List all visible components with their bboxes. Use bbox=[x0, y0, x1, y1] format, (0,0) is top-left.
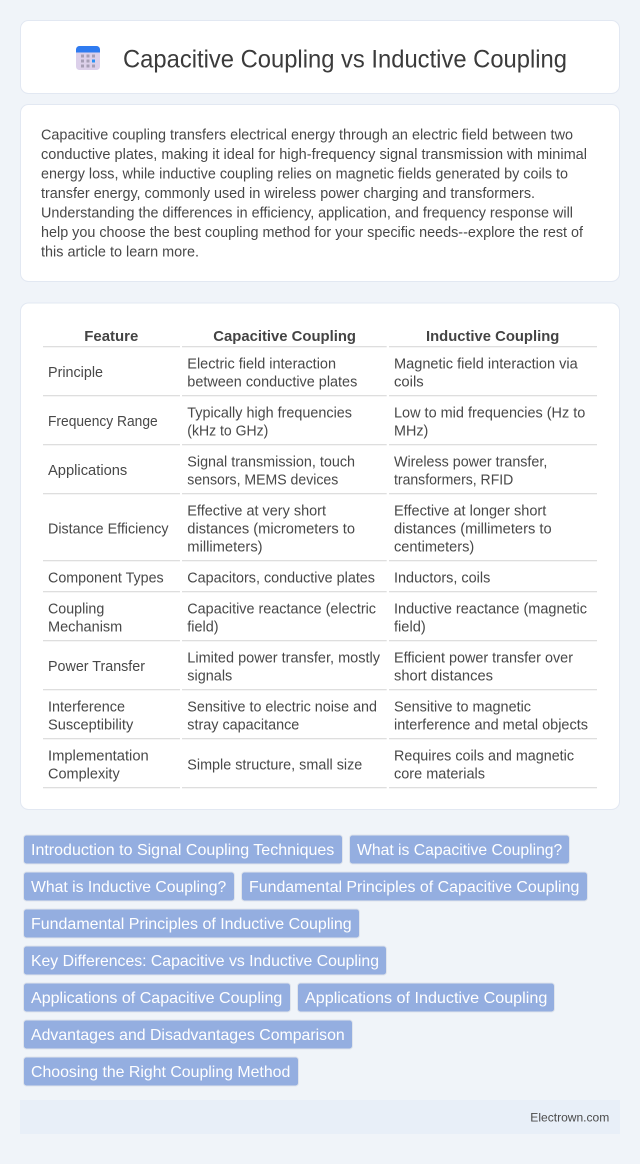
row: interference susceptibility: interference and metal objects bbox=[394, 717, 588, 733]
intro paragraph: Understanding the differences in efficiency, application, and frequency response will bbox=[41, 204, 573, 221]
row: frequency range: Typically high frequencies bbox=[187, 405, 352, 421]
panel: comparison table bbox=[20, 303, 620, 810]
intro paragraph: Capacitive coupling transfers electrical energy through an electric field between two bbox=[41, 126, 573, 143]
tag: introduction: Introduction to Signal Coupling Techniques bbox=[31, 842, 334, 859]
intro paragraph: transfer energy, commonly used in wireless power charging and transformers. bbox=[41, 185, 535, 202]
tag: applications of inductive coupling: Applications of Inductive Coupling bbox=[305, 990, 547, 1007]
row: distance efficiency: centimeters) bbox=[394, 539, 474, 555]
tag: key differences: Key Differences: Capacitive vs Inductive Coupling bbox=[31, 953, 379, 970]
intro paragraph: conductive plates, making it ideal for high-frequency signal transmission with minimal bbox=[41, 146, 587, 163]
footer bbox=[20, 1100, 620, 1134]
row: frequency range bbox=[43, 405, 597, 445]
tag: what is capacitive coupling: What is Capacitive Coupling? bbox=[357, 842, 562, 859]
row: distance efficiency bbox=[43, 503, 597, 561]
panel: topic tags bbox=[24, 835, 588, 1086]
row: applications: Wireless power transfer, bbox=[394, 454, 547, 470]
row: power transfer: short distances bbox=[394, 668, 493, 684]
row: distance efficiency: Distance Efficiency bbox=[48, 521, 169, 537]
title: Capacitive Coupling vs Inductive Coupling bbox=[123, 46, 567, 74]
tag: advantages and disadvantages bbox=[24, 1020, 352, 1049]
panel: header bbox=[20, 20, 620, 94]
row: coupling mechanism: Inductive reactance (magnetic bbox=[394, 601, 587, 617]
row: implementation complexity bbox=[43, 748, 597, 788]
intro paragraph bbox=[41, 126, 587, 260]
row: principle: Magnetic field interaction via bbox=[394, 356, 579, 372]
row: frequency range: (kHz to GHz) bbox=[187, 423, 268, 439]
tag: choosing the right method bbox=[24, 1057, 298, 1086]
row: frequency range: MHz) bbox=[394, 423, 428, 439]
row: coupling mechanism: Mechanism bbox=[48, 619, 122, 635]
row: component types: Component Types bbox=[48, 570, 164, 586]
row: interference susceptibility bbox=[43, 699, 597, 739]
row: distance efficiency: Effective at very short bbox=[187, 503, 326, 519]
table header row: Capacitive Coupling bbox=[213, 328, 356, 345]
row: implementation complexity: Simple structure, small size bbox=[187, 757, 362, 773]
tag: key differences bbox=[24, 946, 386, 975]
panel: introduction bbox=[20, 104, 620, 282]
row: principle: between conductive plates bbox=[187, 374, 357, 390]
row: coupling mechanism: Capacitive reactance (electric bbox=[187, 601, 376, 617]
tag: what is capacitive coupling bbox=[350, 835, 570, 864]
row: principle: Principle bbox=[48, 365, 103, 381]
tag: introduction bbox=[24, 835, 342, 864]
row: component types: Inductors, coils bbox=[394, 570, 490, 586]
row: coupling mechanism: field) bbox=[187, 619, 219, 635]
row: distance efficiency: distances (micrometers to bbox=[187, 521, 355, 537]
row: distance efficiency: Effective at longer short bbox=[394, 503, 546, 519]
row: power transfer: Limited power transfer, mostly bbox=[187, 650, 381, 666]
intro paragraph: energy loss, while inductive coupling relies on magnetic fields generated by coils to bbox=[41, 165, 568, 182]
row: frequency range: Frequency Range bbox=[48, 414, 158, 430]
row: interference susceptibility: Interference bbox=[48, 699, 125, 715]
tag: principles of inductive coupling: Fundamental Principles of Inductive Coupling bbox=[31, 916, 352, 933]
row: power transfer: Efficient power transfer over bbox=[394, 650, 573, 666]
intro paragraph: help you choose the best coupling method for your specific needs--explore the rest of bbox=[41, 224, 584, 241]
row: power transfer: Power Transfer bbox=[48, 659, 145, 675]
row: interference susceptibility: Sensitive to electric noise and bbox=[187, 699, 377, 715]
row: applications: Applications bbox=[48, 463, 127, 479]
row: implementation complexity: core materials bbox=[394, 766, 485, 782]
tag: advantages and disadvantages: Advantages and Disadvantages Comparison bbox=[31, 1027, 345, 1044]
row: component types bbox=[43, 570, 597, 592]
tag: applications of inductive coupling bbox=[298, 983, 554, 1012]
row: implementation complexity: Requires coils and magnetic bbox=[394, 748, 574, 764]
row: coupling mechanism: Coupling bbox=[48, 601, 104, 617]
row: power transfer bbox=[43, 650, 597, 690]
row: interference susceptibility: Susceptibility bbox=[48, 717, 134, 733]
tag: principles of capacitive coupling bbox=[242, 872, 588, 901]
table header row: Inductive Coupling bbox=[426, 328, 559, 345]
row: applications: Signal transmission, touch bbox=[187, 454, 355, 470]
row: implementation complexity: Complexity bbox=[48, 766, 120, 782]
table header row: Feature bbox=[84, 328, 138, 345]
tag: what is inductive coupling bbox=[24, 872, 234, 901]
row: implementation complexity: Implementation bbox=[48, 748, 149, 764]
row: applications: transformers, RFID bbox=[394, 472, 513, 488]
row: applications bbox=[43, 454, 597, 494]
tag: applications of capacitive coupling bbox=[24, 983, 290, 1012]
row: principle bbox=[43, 356, 597, 396]
row: principle: coils bbox=[394, 374, 424, 390]
tag: choosing the right method: Choosing the Right Coupling Method bbox=[31, 1064, 290, 1081]
row: coupling mechanism bbox=[43, 601, 597, 641]
row: component types: Capacitors, conductive plates bbox=[187, 570, 375, 586]
row: distance efficiency: millimeters) bbox=[187, 539, 263, 555]
tag: applications of capacitive coupling: Applications of Capacitive Coupling bbox=[31, 990, 282, 1007]
table header row bbox=[43, 328, 597, 347]
tag: what is inductive coupling: What is Inductive Coupling? bbox=[31, 879, 226, 896]
row: coupling mechanism: field) bbox=[394, 619, 426, 635]
row: principle: Electric field interaction bbox=[187, 356, 336, 372]
row: frequency range: Low to mid frequencies (Hz to bbox=[394, 405, 585, 421]
tag: principles of inductive coupling bbox=[24, 909, 360, 938]
row: interference susceptibility: stray capacitance bbox=[187, 717, 299, 733]
row: applications: sensors, MEMS devices bbox=[187, 472, 338, 488]
tag: principles of capacitive coupling: Fundamental Principles of Capacitive Coupling bbox=[249, 879, 579, 896]
row: power transfer: signals bbox=[187, 668, 232, 684]
footer: Electrown.com bbox=[530, 1110, 609, 1124]
intro paragraph: this article to learn more. bbox=[41, 243, 199, 260]
icon: calendar bbox=[76, 46, 100, 70]
row: interference susceptibility: Sensitive to magnetic bbox=[394, 699, 531, 715]
row: distance efficiency: distances (millimeters to bbox=[394, 521, 552, 537]
